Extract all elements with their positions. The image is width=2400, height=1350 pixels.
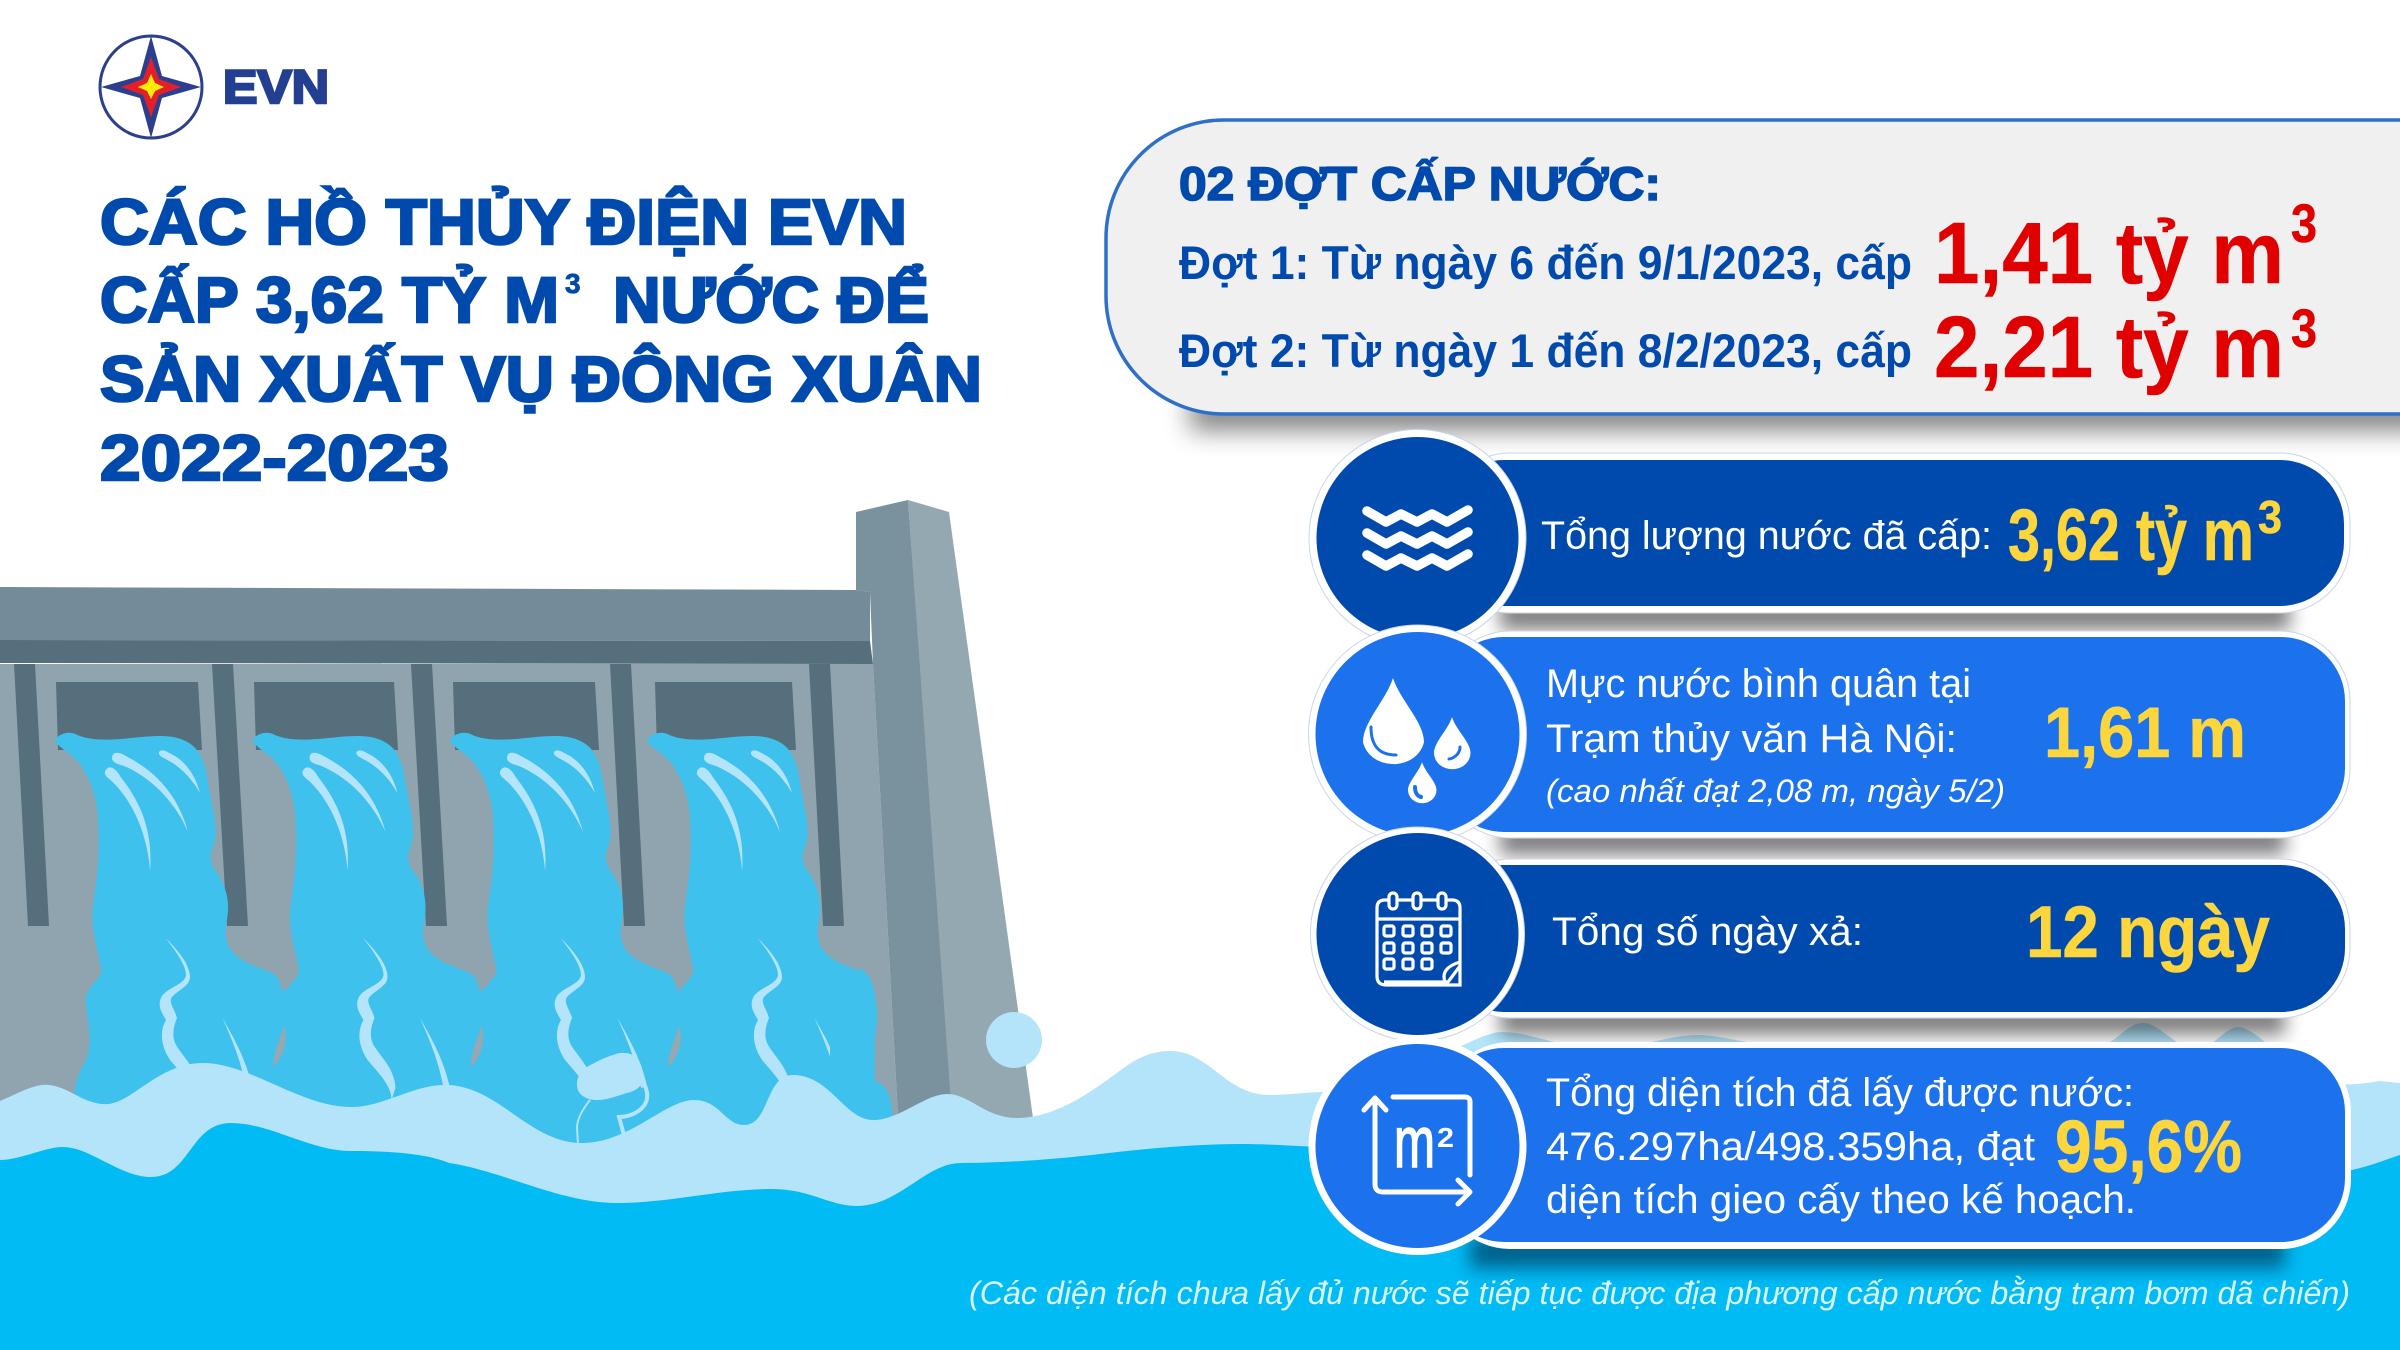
value: 1,61 m: 1,61 m	[2044, 694, 2246, 773]
icon: m2 area	[1364, 1097, 1470, 1204]
panel: 02 đợt cấp nước	[1106, 120, 2400, 430]
panel: mực nước bình quân	[1308, 625, 2350, 855]
logo: EVN	[100, 36, 329, 138]
title: SẢN XUẤT VỤ ĐÔNG XUÂN	[100, 342, 982, 415]
value: 3,62 tỷ m3: 3	[2258, 491, 2282, 543]
footnote: (Các diện tích chưa lấy đủ nước sẽ tiếp tục được địa phương cấp nước bằng trạm bơm dã chiến)	[969, 1275, 2350, 1311]
text: mực nước bình quân: Mực nước bình quân tại	[1546, 662, 1971, 706]
illustration: water falls	[55, 733, 893, 1147]
icon: water drops	[1363, 678, 1470, 803]
text: mực nước bình quân: Trạm thủy văn Hà Nội:	[1546, 717, 1957, 761]
panel: tổng số ngày xả	[1310, 827, 2350, 1041]
water: deep wave	[0, 1123, 2400, 1350]
title	[100, 185, 982, 494]
text: tổng diện tích	[1546, 1071, 2136, 1222]
title: 2022-2023	[100, 422, 449, 494]
panel: tổng lượng nước	[1309, 430, 2350, 646]
value: 95,6%: 95,6%	[2055, 1105, 2242, 1188]
icon: waves	[1367, 510, 1468, 566]
text: đợt 1: Đợt 1: Từ ngày 6 đến 9/1/2023, cấp	[1179, 236, 1912, 289]
text: tổng diện tích: Tổng diện tích đã lấy được nước:	[1546, 1071, 2134, 1115]
icon: calendar	[1377, 893, 1460, 985]
value: 1,41 tỷ m3: 1,41 tỷ m	[1934, 205, 2284, 302]
value: 3,62 tỷ m3: 3,62 tỷ m	[2008, 495, 2254, 576]
logo: EVN: EVN	[223, 60, 329, 113]
value: 12 ngày: 12 ngày	[2026, 892, 2270, 973]
title: NƯỚC ĐỂ	[613, 263, 929, 336]
text: tổng diện tích: diện tích gieo cấy theo kế hoạch.	[1546, 1178, 2136, 1222]
icon: m2 area: 2	[1437, 1122, 1454, 1153]
title: 3	[565, 268, 581, 299]
text: tổng lượng nước đã cấp: Tổng lượng nước đã cấp:	[1541, 514, 1992, 558]
value: 2,21 tỷ m3: 3	[2291, 299, 2317, 359]
text: tổng diện tích: 476.297ha/498.359ha, đạt	[1546, 1125, 2035, 1169]
title: CẤP 3,62 TỶ M	[100, 263, 559, 336]
text: mực nước bình quân	[1546, 662, 2005, 809]
value: 1,41 tỷ m3: 3	[2291, 194, 2317, 254]
title: CÁC HỒ THỦY ĐIỆN EVN	[100, 185, 907, 258]
text: tổng số ngày xả: Tổng số ngày xả:	[1552, 910, 1863, 954]
icon: m2 area: m	[1394, 1103, 1435, 1183]
text: mực nước bình quân: (cao nhất đạt 2,08 m, ngày 5/2)	[1546, 773, 2005, 809]
water: light wave	[0, 1023, 2400, 1350]
panel: tổng diện tích	[1308, 1037, 2351, 1268]
heading: 02 đợt cấp nước: 02 ĐỢT CẤP NƯỚC:	[1179, 157, 1661, 210]
value: 2,21 tỷ m3: 2,21 tỷ m	[1934, 299, 2284, 396]
illustration: dam	[0, 500, 1033, 1118]
text: đợt 2: Đợt 2: Từ ngày 1 đến 8/2/2023, cấp	[1179, 324, 1912, 377]
water splash droplets	[577, 1012, 1042, 1100]
